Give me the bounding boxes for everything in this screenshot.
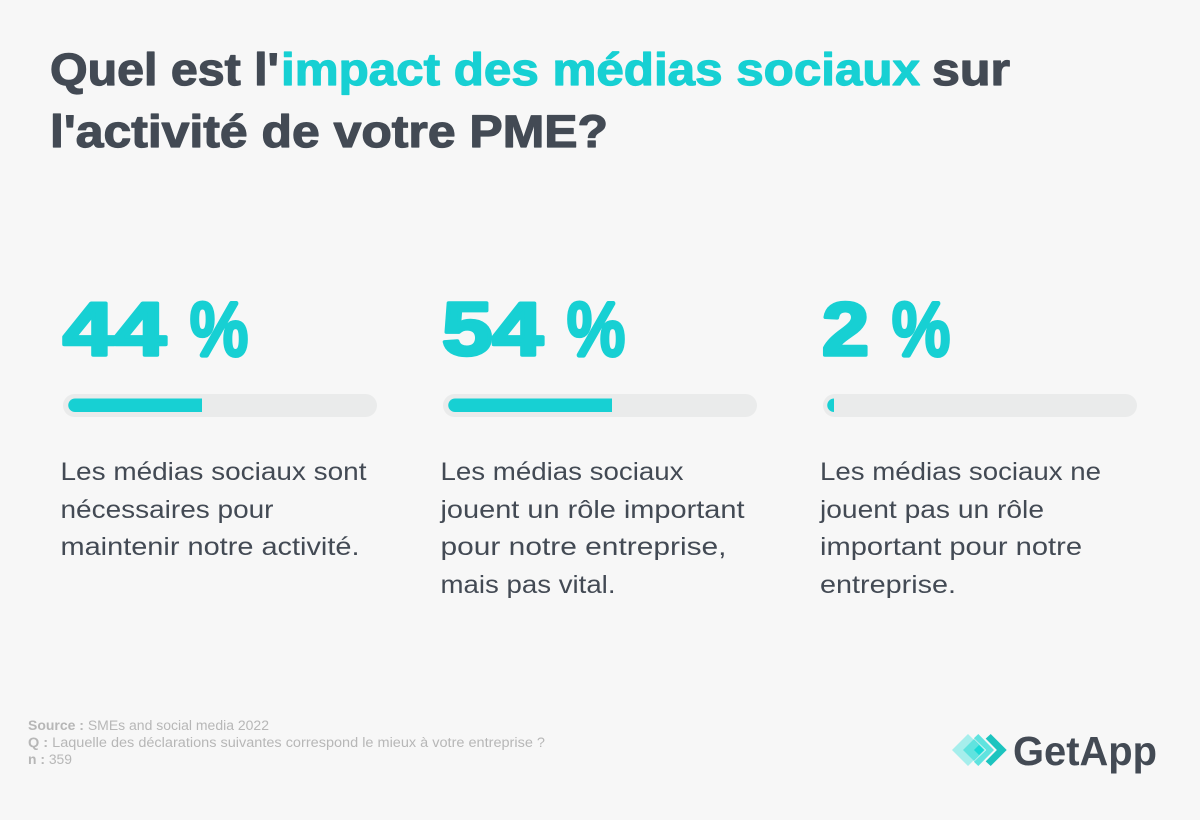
title: impact des médias sociaux [281,44,920,95]
source note [28,718,545,767]
description: 54 %: mais pas vital. [440,571,616,599]
panel: 54 % [439,287,757,599]
progress bar: 44 % [63,394,377,417]
description: 54 % [439,458,745,599]
description: 2 %: jouent pas un rôle [819,496,1044,524]
description: 54 %: Les médias sociaux [440,458,684,486]
value: 54 %: % [567,287,625,371]
icon: GetApp mark [952,734,1007,766]
value: 2 %: 2 [822,287,869,371]
wordmark: GetApp [1013,728,1157,774]
description: 2 % [819,458,1101,599]
value: 54 % [442,287,625,371]
source note: n : 359 [28,752,72,767]
logo: GetApp [952,728,1157,774]
title [50,44,1010,157]
value: 54 %: 54 [442,287,543,371]
description: 44 %: nécessaires pour [60,496,274,524]
value: 44 %: % [190,287,248,371]
source note: Q : Laquelle des déclarations suivantes correspond le mieux à votre entreprise ? [28,735,545,750]
source note: Source : SMEs and social media 2022 [28,718,269,733]
title: sur [932,44,1010,95]
description: 54 %: jouent un rôle important [439,496,745,524]
value: 2 %: % [892,287,950,371]
title: l'activité de votre PME? [50,106,608,157]
value: 44 %: 44 [63,287,166,371]
value: 44 % [63,287,248,371]
description: 44 %: Les médias sociaux sont [60,458,367,486]
description: 44 %: maintenir notre activité. [60,533,360,561]
title: Quel est l' [50,44,279,95]
panel: 44 % [60,287,377,561]
progress bar: 54 % [443,394,757,417]
progress bar: 2 % [823,394,1137,417]
description: 2 %: important pour notre [820,533,1082,561]
description: 54 %: pour notre entreprise, [440,533,726,561]
description: 2 %: Les médias sociaux ne [820,458,1101,486]
description: 2 %: entreprise. [820,571,956,599]
description: 44 % [60,458,367,561]
panel: 2 % [819,287,1137,599]
value: 2 % [822,287,950,371]
